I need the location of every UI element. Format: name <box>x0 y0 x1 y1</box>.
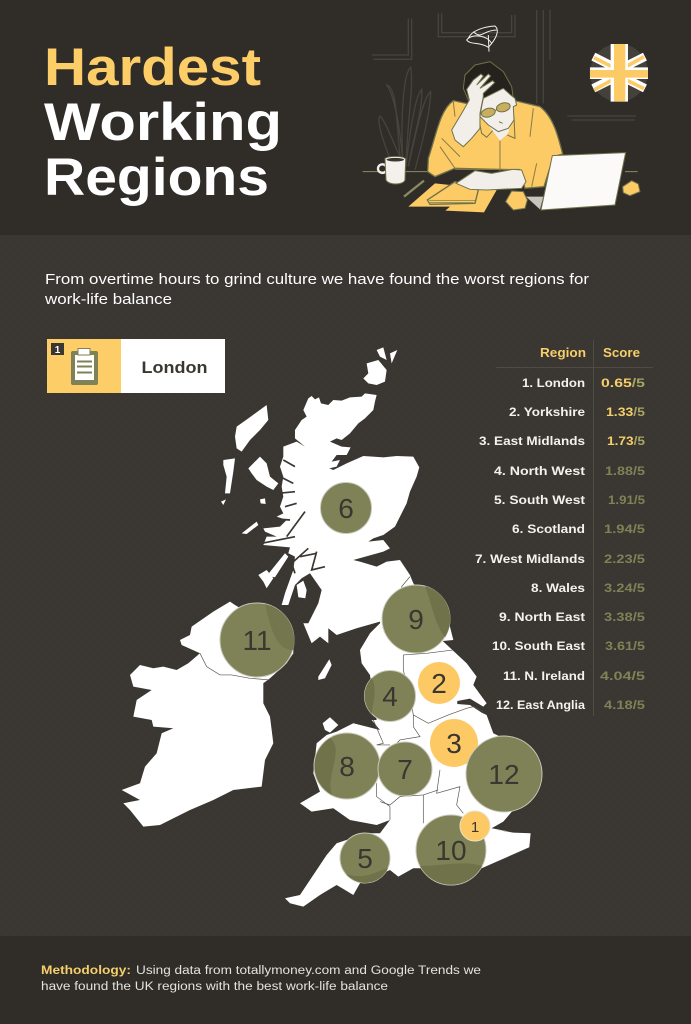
bubble 12: East Anglia <box>466 736 542 812</box>
methodology footer: have found the UK regions with the best work-life balance <box>41 981 388 993</box>
England and Wales <box>285 600 533 907</box>
region names: 10. South East <box>492 639 585 653</box>
region names: 5. South West <box>494 493 585 507</box>
region names: 4. North West <box>494 464 585 478</box>
methodology footer: Using data from totallymoney.com and Google Trends we <box>136 965 481 977</box>
bubble 6: Scotland: 6 <box>338 493 354 524</box>
face <box>480 88 517 132</box>
bubble 3: East Midlands <box>430 719 478 767</box>
lower hand <box>456 169 526 190</box>
region names: 8. Wales <box>531 581 585 595</box>
title <box>44 38 282 207</box>
region names: 3. East Midlands <box>479 434 585 448</box>
Scotland <box>263 393 453 647</box>
man <box>428 62 563 190</box>
illustration: stressed man at laptop <box>363 10 648 212</box>
icon: scribble thought <box>467 26 497 52</box>
rank badge: 1 <box>55 345 61 356</box>
intro text: work-life balance <box>44 292 172 308</box>
icon: pen <box>404 181 424 197</box>
bubble 2: Yorkshire: 2 <box>431 668 447 699</box>
scores: 1.73 /5 <box>607 434 645 448</box>
shirt <box>428 101 563 188</box>
icon: crumpled paper balls <box>506 181 640 210</box>
bubble 10: South East <box>416 815 486 885</box>
bubble 4: North West: 4 <box>382 681 398 712</box>
rank badge <box>51 343 64 356</box>
scores: 1.94/5 <box>604 522 645 536</box>
bubble 1: London <box>460 811 490 841</box>
scores: 3.61/5 <box>605 639 645 653</box>
bubble 7: West Midlands <box>378 742 432 796</box>
scores: 3.38/5 <box>604 610 645 624</box>
bubble 8: Wales: 8 <box>339 751 355 782</box>
icon: laptop <box>526 153 626 210</box>
Anglesey and Isle of Man <box>318 659 338 733</box>
neck and collar <box>488 122 512 141</box>
bubble 8: Wales <box>314 733 380 799</box>
title: Hardest <box>44 38 261 97</box>
sea lochs <box>262 460 325 573</box>
scores: 1.33 /5 <box>606 405 645 419</box>
bubble 5: South West: 5 <box>357 843 373 874</box>
legend: selected region <box>47 339 225 393</box>
scores: 0.65 /5 <box>601 376 645 390</box>
table headers <box>540 345 640 360</box>
hair <box>463 62 513 103</box>
bubble 6: Scotland <box>320 482 372 534</box>
bubble 7: West Midlands: 7 <box>397 754 413 785</box>
bubble 12: East Anglia: 12 <box>488 759 520 790</box>
scores: 1.88/5 <box>605 464 645 478</box>
Scottish islands <box>221 347 397 598</box>
title: Regions <box>44 148 269 207</box>
title: Working <box>44 93 282 152</box>
table headers: Score <box>603 345 640 360</box>
bubble 9: North East: 9 <box>408 604 424 635</box>
table headers: Region <box>540 345 586 360</box>
raised hand <box>452 74 495 147</box>
region names: 12. East Anglia <box>496 698 585 712</box>
methodology footer <box>41 965 481 993</box>
methodology footer: Methodology: <box>41 965 131 977</box>
scores: 4.04/5 <box>600 669 645 683</box>
region names: 11. N. Ireland <box>503 669 585 683</box>
UK and Ireland map <box>122 347 533 907</box>
bubble 11: N. Ireland <box>220 603 294 677</box>
scores: 3.24/5 <box>604 581 645 595</box>
intro text: From overtime hours to grind culture we have found the worst regions for <box>45 272 589 288</box>
Ireland <box>122 602 293 827</box>
scores: 1.91/5 <box>608 493 645 507</box>
icon: clipboard <box>71 348 98 385</box>
region borders <box>200 577 483 823</box>
region names: 1. London <box>522 376 585 390</box>
bubble 2: Yorkshire <box>418 662 460 704</box>
bubble 10: South East: 10 <box>435 835 467 866</box>
bubble 9: North East <box>382 585 450 653</box>
scores <box>600 376 645 712</box>
region names <box>475 376 585 712</box>
bubble 1: London: 1 <box>471 819 479 836</box>
region names: 9. North East <box>499 610 585 624</box>
bubble 4: North West <box>364 670 416 722</box>
region names: 6. Scotland <box>512 522 585 536</box>
ranking table <box>475 340 653 716</box>
icon: coffee mug <box>378 157 406 184</box>
scores: 4.18/5 <box>604 698 645 712</box>
region names: 2. Yorkshire <box>509 405 585 419</box>
bubble 5: South West <box>340 833 390 883</box>
region bubbles <box>220 482 542 885</box>
legend: selected region: London <box>142 359 208 377</box>
intro text <box>44 272 589 308</box>
scores: 2.23/5 <box>604 552 645 566</box>
icon: papers and book <box>408 182 497 212</box>
icon: union flag <box>590 44 648 102</box>
bubble 11: N. Ireland: 11 <box>242 625 272 656</box>
region names: 7. West Midlands <box>475 552 585 566</box>
bubble 3: East Midlands: 3 <box>446 728 462 759</box>
